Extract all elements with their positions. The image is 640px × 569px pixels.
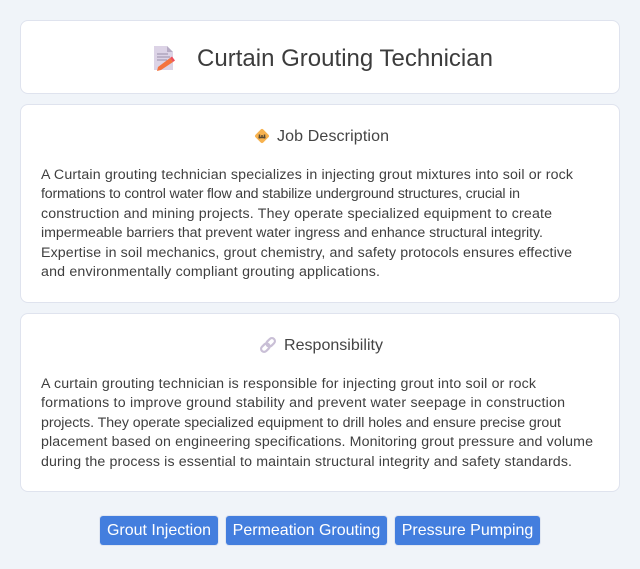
panel: job description <box>20 104 620 303</box>
tag: grout injection <box>100 516 218 545</box>
tag: grout injection: Grout Injection <box>107 522 211 539</box>
heading: responsibility: Responsibility <box>284 337 383 354</box>
text block: job description: construction and mining projects. They operate specialized equipment to create <box>41 206 552 222</box>
title: Curtain Grouting Technician <box>197 45 493 72</box>
panel: responsibility <box>20 313 620 492</box>
icon: chain link <box>260 337 276 353</box>
icon: document with pencil <box>154 46 175 71</box>
tag: permeation grouting <box>226 516 387 545</box>
text block: responsibility: placement based on engineering specifications. Monitoring grout pressure and volume <box>41 434 593 450</box>
text block: job description <box>41 167 574 280</box>
panel: title card <box>20 20 620 94</box>
text block: responsibility: A curtain grouting technician is responsible for injecting grout into soil or rock <box>41 376 537 392</box>
heading: job description: Job Description <box>277 128 389 145</box>
text block: job description: formations to control water flow and stabilize underground structures, crucial in <box>41 186 520 202</box>
text block: job description: and environmentally compliant grouting applications. <box>41 264 380 280</box>
text block: job description: A Curtain grouting technician specializes in injecting grout mixtures into soil or rock <box>41 167 574 183</box>
tag: pressure pumping: Pressure Pumping <box>402 522 533 539</box>
text block: responsibility: formations to improve ground stability and prevent water seepage in construction <box>41 395 565 411</box>
icon: road sign diamond <box>255 128 269 144</box>
text block: job description: impermeable barriers that prevent water ingress and enhance structural integrity. <box>41 225 543 241</box>
tag: permeation grouting: Permeation Grouting <box>233 522 380 539</box>
text block: job description: Expertise in soil mechanics, grout chemistry, and safety protocols ensures effective <box>41 245 572 261</box>
text block: responsibility: projects. They operate specialized equipment to drill holes and ensure precise grout <box>41 415 561 431</box>
text block: responsibility <box>41 376 593 470</box>
text block: responsibility: during the process is essential to maintain structural integrity and safety standards. <box>41 454 572 470</box>
tag: pressure pumping <box>395 516 540 545</box>
